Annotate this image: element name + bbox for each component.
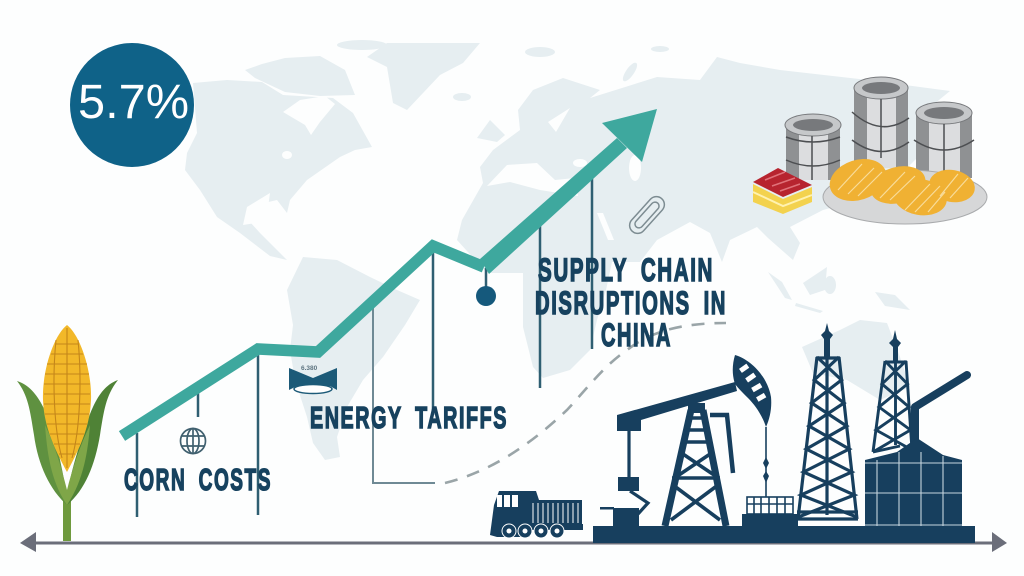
label: corn costs: CORN COSTS (124, 462, 272, 497)
angled discharge pipe (915, 375, 967, 440)
can right (914, 102, 974, 178)
storage tank (865, 438, 962, 526)
icon: energy meter (289, 365, 337, 394)
platform base (593, 526, 975, 543)
icon: globe (180, 428, 206, 454)
pitman rod and motor (629, 431, 648, 514)
derrick tower one (797, 357, 858, 519)
vertical data stems (137, 178, 592, 517)
polished rod and cable (765, 427, 767, 497)
label: supply chain disruptions in China: CHINA (601, 317, 672, 353)
world map background (185, 40, 950, 460)
icon: truck (490, 491, 583, 538)
can left (785, 114, 841, 180)
icon: paperclip (626, 193, 668, 237)
icon: steel cans and food plate (753, 77, 987, 224)
label: supply chain disruptions in China (535, 252, 727, 353)
connector line to dashed route (373, 308, 435, 483)
pump frame (688, 403, 705, 413)
pump jack beam and horsehead (617, 382, 737, 431)
can tall (852, 77, 909, 168)
icon: corn cob (17, 325, 118, 541)
railing (747, 497, 793, 514)
plate (823, 170, 987, 224)
icon: energy meter: 6.380 (301, 365, 318, 372)
percentage badge: 5.7% (78, 76, 189, 129)
icon: oil rig silhouette (593, 323, 975, 543)
label: energy tariffs: ENERGY TARIFFS (310, 400, 508, 435)
marker dot (476, 286, 496, 306)
map seas (243, 96, 641, 240)
rising growth arrow (122, 109, 657, 436)
layered cake (753, 168, 812, 214)
derrick tower two (873, 361, 912, 452)
dashed route curve (445, 323, 726, 483)
percentage badge (70, 43, 194, 167)
biscuits (824, 152, 977, 219)
label: supply chain disruptions in China: SUPPLY CHAIN (538, 252, 714, 288)
label: supply chain disruptions in China: DISRUPTIONS IN (535, 285, 727, 321)
timeline axis arrow (20, 532, 1007, 552)
